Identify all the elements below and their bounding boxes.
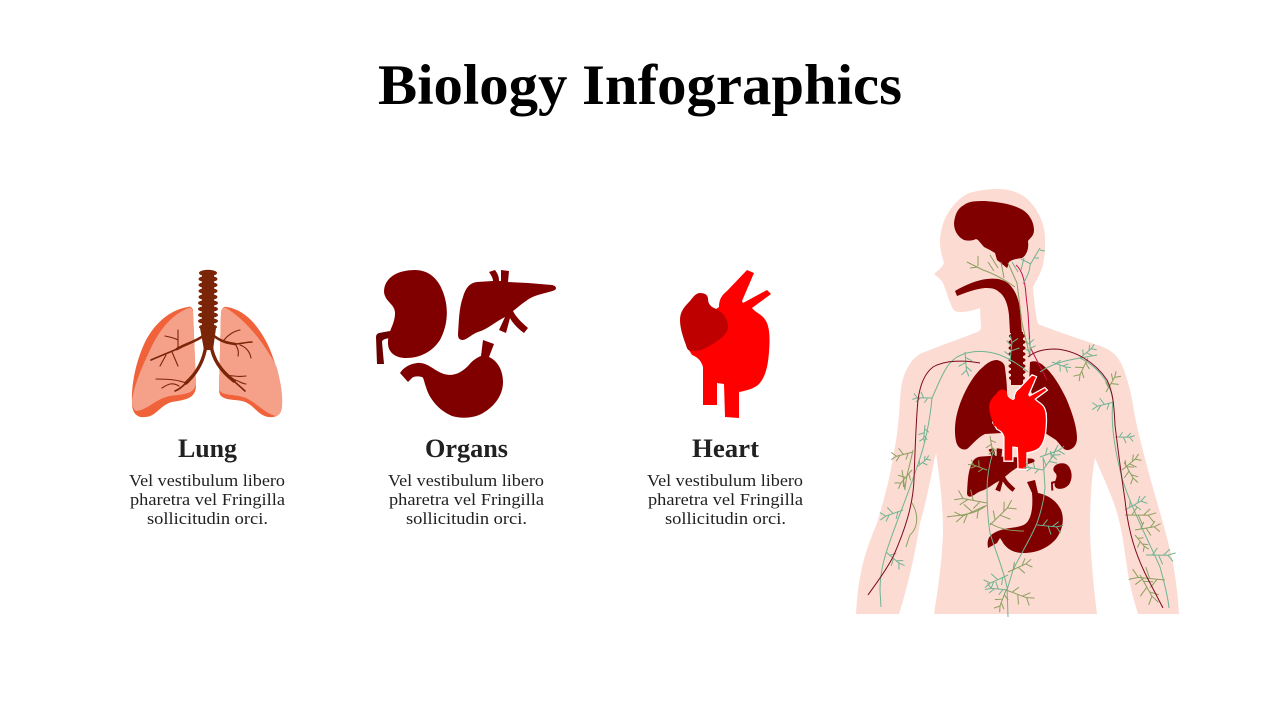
text block: lung: pharetra vel Fringilla	[130, 490, 286, 509]
icon: lungs	[132, 270, 282, 417]
text block: lung: sollicitudin orci.	[147, 509, 268, 528]
organ: stomach	[988, 480, 1063, 553]
text block: heart: pharetra vel Fringilla	[648, 490, 804, 509]
text block: organs	[388, 471, 545, 528]
heading: lung: Lung	[178, 434, 237, 463]
artery lines	[868, 349, 1163, 608]
heading: heart: Heart	[692, 434, 759, 463]
organ: brain	[954, 201, 1034, 268]
neck vessels	[967, 248, 1047, 380]
organ: airway	[955, 279, 1022, 333]
green nerve network	[878, 335, 1176, 617]
text block: lung	[129, 471, 286, 528]
olive nerve network	[890, 355, 1167, 613]
icon: stomach	[400, 340, 503, 418]
title: Biology Infographics	[378, 54, 902, 117]
panel: lung	[129, 270, 286, 528]
organ: heart	[989, 375, 1047, 470]
panel: organs	[376, 270, 556, 528]
heading: organs: Organs	[425, 434, 508, 463]
organ: trachea rings	[1008, 332, 1026, 385]
icon: heart	[680, 270, 771, 418]
text block: heart: Vel vestibulum libero	[647, 471, 803, 490]
organ: liver	[967, 448, 1035, 497]
organ: right lung	[1029, 361, 1077, 450]
text block: lung: Vel vestibulum libero	[129, 471, 285, 490]
trachea	[198, 270, 218, 350]
text block: organs: Vel vestibulum libero	[388, 471, 544, 490]
text block: heart: sollicitudin orci.	[665, 509, 786, 528]
bronchi	[151, 330, 252, 391]
text block: organs: sollicitudin orci.	[406, 509, 527, 528]
text block: organs: pharetra vel Fringilla	[389, 490, 545, 509]
organ: left lung	[955, 360, 1007, 450]
icon: liver	[458, 270, 556, 340]
organ: kidney	[1051, 463, 1072, 491]
icon: kidney	[376, 270, 447, 364]
text block: heart	[647, 471, 804, 528]
panel: heart	[647, 270, 804, 528]
body silhouette	[856, 189, 1179, 614]
panel: human body diagram	[856, 189, 1179, 617]
